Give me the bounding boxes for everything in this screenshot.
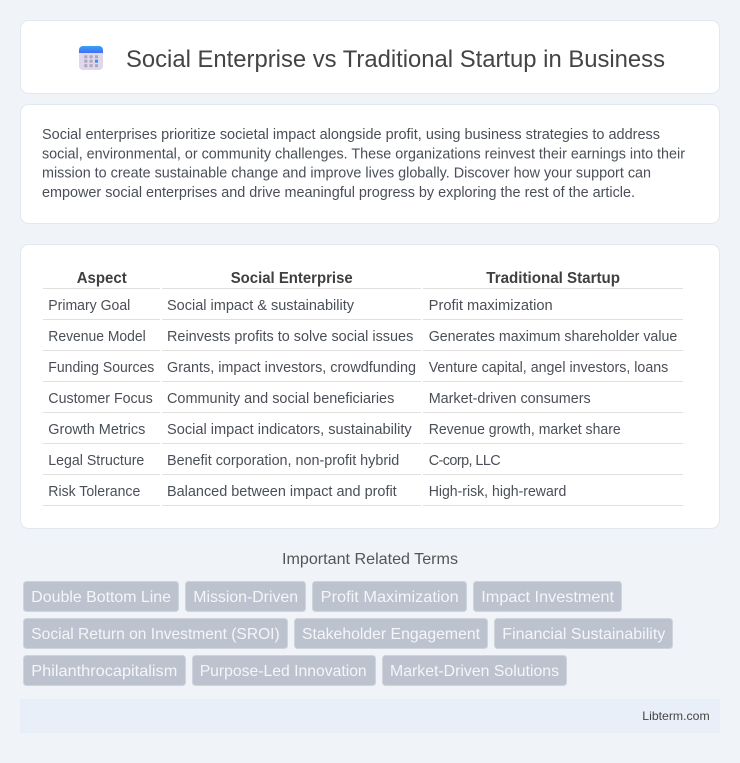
footer xyxy=(20,699,720,733)
table header row: Traditional Startup xyxy=(486,270,620,287)
tag: purpose-led innovation xyxy=(192,656,376,686)
table header row: Social Enterprise xyxy=(231,270,353,287)
row: customer focus: Market-driven consumers xyxy=(429,391,591,407)
row: risk tolerance: Risk Tolerance xyxy=(48,484,140,500)
row: growth metrics: Growth Metrics xyxy=(48,422,145,438)
row: funding sources: Grants, impact investors, crowdfunding xyxy=(167,360,416,376)
tag: financial sustainability: Financial Sustainability xyxy=(502,626,665,643)
row: customer focus: Customer Focus xyxy=(48,391,153,407)
text block: introduction: social, environmental, or community challenges. These organizations reinvest their earnings into their xyxy=(42,146,685,162)
tag: social return on investment xyxy=(24,618,288,648)
row: funding sources: Venture capital, angel investors, loans xyxy=(429,360,668,376)
tag: mission-driven: Mission-Driven xyxy=(193,589,298,606)
table header row: Aspect xyxy=(77,270,127,287)
row: risk tolerance: Balanced between impact and profit xyxy=(167,484,397,500)
table header row xyxy=(77,270,620,287)
row: primary goal: Social impact & sustainability xyxy=(167,298,355,314)
row: primary goal: Primary Goal xyxy=(48,298,130,314)
row: legal structure xyxy=(48,453,501,469)
row: revenue model xyxy=(48,329,677,345)
tag: social return on investment: Social Return on Investment (SROI) xyxy=(31,626,280,643)
row: customer focus xyxy=(48,391,591,407)
tag: purpose-led innovation: Purpose-Led Innovation xyxy=(200,663,367,680)
heading: related terms: Important Related Terms xyxy=(282,551,458,568)
panel: comparison table xyxy=(20,244,720,528)
tag: financial sustainability xyxy=(494,618,672,648)
row: legal structure: Benefit corporation, non-profit hybrid xyxy=(167,453,399,469)
row: risk tolerance xyxy=(48,484,566,500)
text block: introduction: mission to create sustainable change and improve lives globally. Discover how your support can xyxy=(42,166,651,182)
tag: impact investment: Impact Investment xyxy=(481,589,615,606)
tag group: related terms xyxy=(24,582,672,686)
footer credit: Libterm.com xyxy=(642,709,710,723)
tag: market-driven solutions: Market-Driven Solutions xyxy=(390,663,559,680)
tag: double bottom line: Double Bottom Line xyxy=(31,589,171,606)
tag: stakeholder engagement xyxy=(294,618,488,648)
title: Social Enterprise vs Traditional Startup in Business xyxy=(126,46,665,73)
row: funding sources xyxy=(48,360,668,376)
row: primary goal xyxy=(48,298,553,314)
text block: introduction: Social enterprises prioritize societal impact alongside profit, using business strategies to address xyxy=(42,127,660,143)
row: growth metrics: Revenue growth, market share xyxy=(429,422,621,438)
panel: introduction xyxy=(20,104,720,224)
row: growth metrics xyxy=(48,422,621,438)
tag: philanthrocapitalism xyxy=(24,656,186,686)
text block: introduction xyxy=(42,127,685,201)
row: legal structure: Legal Structure xyxy=(48,453,144,469)
tag: profit maximization: Profit Maximization xyxy=(321,589,459,606)
tag: philanthrocapitalism: Philanthrocapitalism xyxy=(31,663,177,680)
tag: stakeholder engagement: Stakeholder Engagement xyxy=(302,626,481,643)
tag: profit maximization xyxy=(312,582,466,612)
tag: impact investment xyxy=(474,582,622,612)
row: risk tolerance: High-risk, high-reward xyxy=(429,484,566,500)
text block: introduction: empower social enterprises and drive meaningful progress by exploring the rest of the article. xyxy=(42,185,635,201)
row: revenue model: Generates maximum shareholder value xyxy=(429,329,677,345)
row: legal structure: C-corp, LLC xyxy=(429,453,501,469)
panel: header xyxy=(20,20,720,94)
row: customer focus: Community and social beneficiaries xyxy=(167,391,394,407)
row: revenue model: Reinvests profits to solve social issues xyxy=(167,329,413,345)
tag: double bottom line xyxy=(24,582,178,612)
row: funding sources: Funding Sources xyxy=(48,360,154,376)
row: primary goal: Profit maximization xyxy=(429,298,553,314)
row: revenue model: Revenue Model xyxy=(48,329,146,345)
icon: calendar xyxy=(79,46,103,70)
row: growth metrics: Social impact indicators, sustainability xyxy=(167,422,413,438)
tag: mission-driven xyxy=(186,582,306,612)
tag: market-driven solutions xyxy=(382,656,566,686)
